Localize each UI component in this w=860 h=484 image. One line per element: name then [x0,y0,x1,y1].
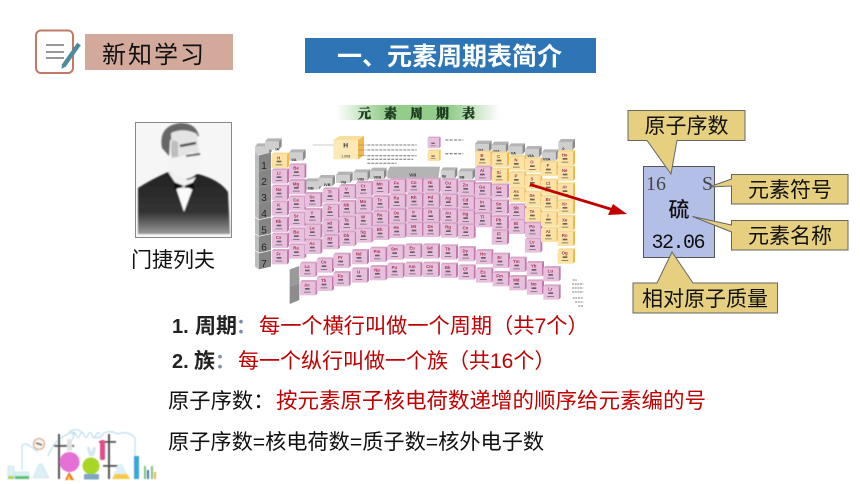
group header blocks: VIA [527,153,534,158]
main element cells: Hg [462,212,469,217]
main element cells: P [515,173,518,178]
icon: notes and pencil [36,30,79,73]
title banner: 一、元素周期表简介 [337,43,562,71]
lanthanide and actinide rows: Lu [548,268,553,273]
main element cells: Be [293,166,299,171]
main element cells: Rn [562,233,568,238]
main element cells: Ac [309,241,315,246]
main element cells: Ar [562,185,567,190]
text: group definition: 2. [172,351,189,373]
main element cells: Nb [343,202,350,207]
text: group definition: 族 [194,350,215,373]
main element cells: Hf [327,221,333,226]
main element cells: Hs [394,225,400,230]
main element cells: Te [530,209,535,214]
period number column [255,138,282,270]
main element cells: V [345,186,348,191]
illustration: laboratory glassware [8,430,156,480]
yellow conical flask [112,464,130,479]
period number column: 5 [261,226,267,237]
main element cells: Xe [562,217,568,222]
main element cells: Fe [394,180,399,185]
lanthanide and actinide rows: Np [374,267,380,272]
group header blocks: IB [442,173,446,178]
main element cells: H [277,155,280,160]
main element cells: Ra [293,246,299,251]
lanthanide and actinide rows: Cf [463,267,468,272]
callout: 元素名称 [692,216,848,250]
lanthanide and actinide rows [290,243,561,304]
period number column: 3 [261,193,267,204]
main element cells: Sn [496,202,502,207]
main element cells: Pb [496,217,502,222]
beakers [8,466,29,479]
group header blocks: IVA [493,148,500,153]
main element cells: Po [529,224,535,229]
main element cells: Ga [479,184,485,189]
test tube and stand [99,434,120,479]
main element cells: Db [343,233,350,238]
callout: 元素符号: 元素符号 [748,179,832,202]
heading: 新知学习 [85,34,233,70]
group header blocks: IA [275,147,279,152]
main element cells: Ne [562,168,568,173]
main element cells: Cd [462,197,469,202]
lanthanide and actinide rows: Ce [321,260,327,265]
green flask [82,447,100,480]
caption: 门捷列夫: 门捷列夫 [131,249,215,272]
group header blocks: VB [341,179,346,184]
main element cells: Ge [496,186,502,191]
main element cells: Ni [428,180,433,185]
main element cells: Ds [428,224,434,229]
main element cells: S [531,176,534,181]
main element cells: Mo [360,199,366,204]
lanthanide and actinide rows: Md [513,277,520,282]
lanthanide and actinide rows: Yb [531,263,537,268]
main element cells: Mn [377,182,383,187]
group header blocks: IIIB [308,186,314,191]
main element cells: C [497,154,500,159]
text: atomic number definition: 按元素原子核电荷数递增的顺序给元素编的号 [276,389,706,413]
lanthanide and actinide rows: Dy [463,248,469,253]
lanthanide and actinide rows: La [304,264,310,269]
text: period definition: 每一个横行叫做一个周期（共7个） [259,314,589,338]
element card: sulfur: S [702,173,713,195]
lanthanide and actinide rows: U [357,270,360,275]
main element cells: In [480,200,484,205]
lanthanide and actinide rows: Bk [445,265,451,270]
lanthanide and actinide rows: Cm [426,264,433,269]
text: group definition: 每一个纵行叫做一个族（共16个） [238,350,555,373]
callout: 元素符号 [709,174,848,204]
lanthanide and actinide rows: Pu [392,265,397,270]
flask with burner [60,439,80,480]
lanthanide and actinide rows: Er [497,255,502,260]
lanthanide and actinide rows: Eu [409,246,415,251]
main element cells: Cn [462,226,469,231]
element card: sulfur: 16 [646,173,666,195]
main element cells: Bh [377,227,383,232]
main element cells: Rf [327,236,333,241]
lanthanide and actinide rows: Gd [427,246,433,251]
callout: 原子序数 [628,110,745,174]
main element cells: Ag [445,196,451,201]
main element cells [272,150,575,264]
main element cells: At [546,229,551,234]
element card: sulfur: 硫 [668,194,690,224]
lanthanide and actinide rows: Ac [304,282,310,287]
lanthanide and actinide rows: Pm [374,249,381,254]
main element cells: As [513,189,519,194]
main element cells: Na [276,187,282,192]
period number column: 6 [261,242,267,253]
main element cells: N [514,157,518,162]
text: period definition: ： [236,316,256,338]
main element cells: Sb [513,206,519,211]
main element cells: Bi [514,221,518,226]
main element cells: Mt [411,224,417,229]
lanthanide and actinide rows: Lr [548,287,553,292]
legend sample cell: 1.008 [341,154,350,158]
legend sample cell: H [343,143,348,150]
main element cells: Se [529,193,535,198]
lanthanide and actinide rows: Ho [480,251,486,256]
lanthanide and actinide rows: Sm [391,247,398,252]
main element cells: Si [497,170,501,175]
text: atomic number definition: 原子序数： [168,389,274,413]
main element cells: W [361,214,366,219]
main element cells: Ru [393,196,400,201]
period number column: 1 [261,161,267,172]
lanthanide and actinide rows: Tm [513,259,520,264]
lanthanide and actinide rows: Es [480,270,486,275]
main element cells: He [562,152,568,157]
lanthanide and actinide rows: Pr [338,255,343,260]
main element cells: Cr [361,183,366,188]
lanthanide and actinide rows: Fm [496,273,503,278]
group header blocks: VIB [357,176,364,181]
group header blocks [275,139,575,191]
main element cells: Fr [276,251,281,256]
tall cylinder and tubes [134,456,156,479]
main element cells: Rg [445,225,451,230]
lanthanide and actinide rows: Th [321,278,327,283]
main element cells: Cu [445,181,451,186]
main element cells: Kr [562,201,567,206]
main element cells: Lv [529,240,535,245]
title banner [305,38,596,73]
main element cells: Og [562,251,568,256]
group header blocks: IIA [291,157,297,162]
period number column: 4 [261,209,267,220]
text: atomic number equation: 原子序数=核电荷数=质子数=核外电子数 [168,430,544,454]
heading: 新知学习: 新知学习 [102,42,206,69]
main element cells: F [547,163,550,168]
text: group definition: ： [215,351,235,373]
group header blocks: IIIA [478,148,484,153]
main element cells: La [309,226,315,231]
main element cells: Al [480,168,484,173]
main element cells: Au [445,210,451,215]
group header blocks: IIB [459,174,465,179]
main element cells: Fl [497,232,501,237]
periodic table image [255,103,583,306]
main element cells: Mg [293,181,299,186]
lanthanide and actinide rows: Pa [338,273,344,278]
legend sample cell [313,136,463,163]
main element cells: B [480,153,484,158]
portrait: Mendeleev [136,122,232,238]
main element cells: Rh [411,195,417,200]
main element cells: Tl [480,214,484,219]
main element cells: Sg [360,230,366,235]
main element cells: Ba [293,230,299,235]
text: period definition: 周期 [195,315,237,338]
main element cells: Pd [428,195,433,200]
main element cells: Ti [328,190,332,195]
group header blocks: VA [511,150,516,155]
group header blocks: VIII [409,172,416,177]
main element cells: Y [311,210,314,215]
arrow: table to element card [530,184,627,215]
main element cells: Ir [412,210,415,215]
element card: sulfur: 32.06 [652,232,706,255]
element card: sulfur [644,166,714,258]
main element cells: Os [393,210,400,215]
main element cells: Cl [546,181,550,186]
lanthanide and actinide rows: No [531,282,537,287]
group header blocks: IVB [324,182,331,187]
main element cells: Pt [428,210,433,215]
period number column: 7 [261,259,267,270]
group header blocks: 0 [562,146,565,151]
main element cells: Ca [293,198,299,203]
callout: 元素名称: 元素名称 [748,225,832,248]
main element cells: Br [546,197,551,202]
main element cells: Zr [327,206,332,211]
main element cells: I [547,213,549,218]
callout: 原子序数: 原子序数 [644,115,728,138]
main element cells: Li [277,171,281,176]
main element cells: Sc [309,194,315,199]
group header blocks: VIIA [543,156,551,161]
lanthanide and actinide rows: Nd [356,251,362,256]
text: period definition: 1. [172,316,189,338]
group header blocks: VIIB [373,175,381,180]
callout: 相对原子质量: 相对原子质量 [642,288,768,311]
main element cells: Tc [377,197,383,202]
table title: 元素周期表 [358,103,488,122]
main element cells: K [277,203,281,208]
main element cells: Rb [276,219,282,224]
main element cells: O [530,160,534,165]
period number column: 2 [261,177,267,188]
lanthanide and actinide rows: Am [409,264,416,269]
main element cells: Cs [276,235,282,240]
side note [572,280,583,306]
callout: 相对原子质量 [633,252,778,313]
main element cells: Re [377,212,383,217]
main element cells: Ta [344,218,349,223]
main element cells: Sr [294,214,299,219]
main element cells: Zn [463,182,468,187]
lanthanide and actinide rows: Tb [445,247,451,252]
main element cells: Co [411,180,417,185]
